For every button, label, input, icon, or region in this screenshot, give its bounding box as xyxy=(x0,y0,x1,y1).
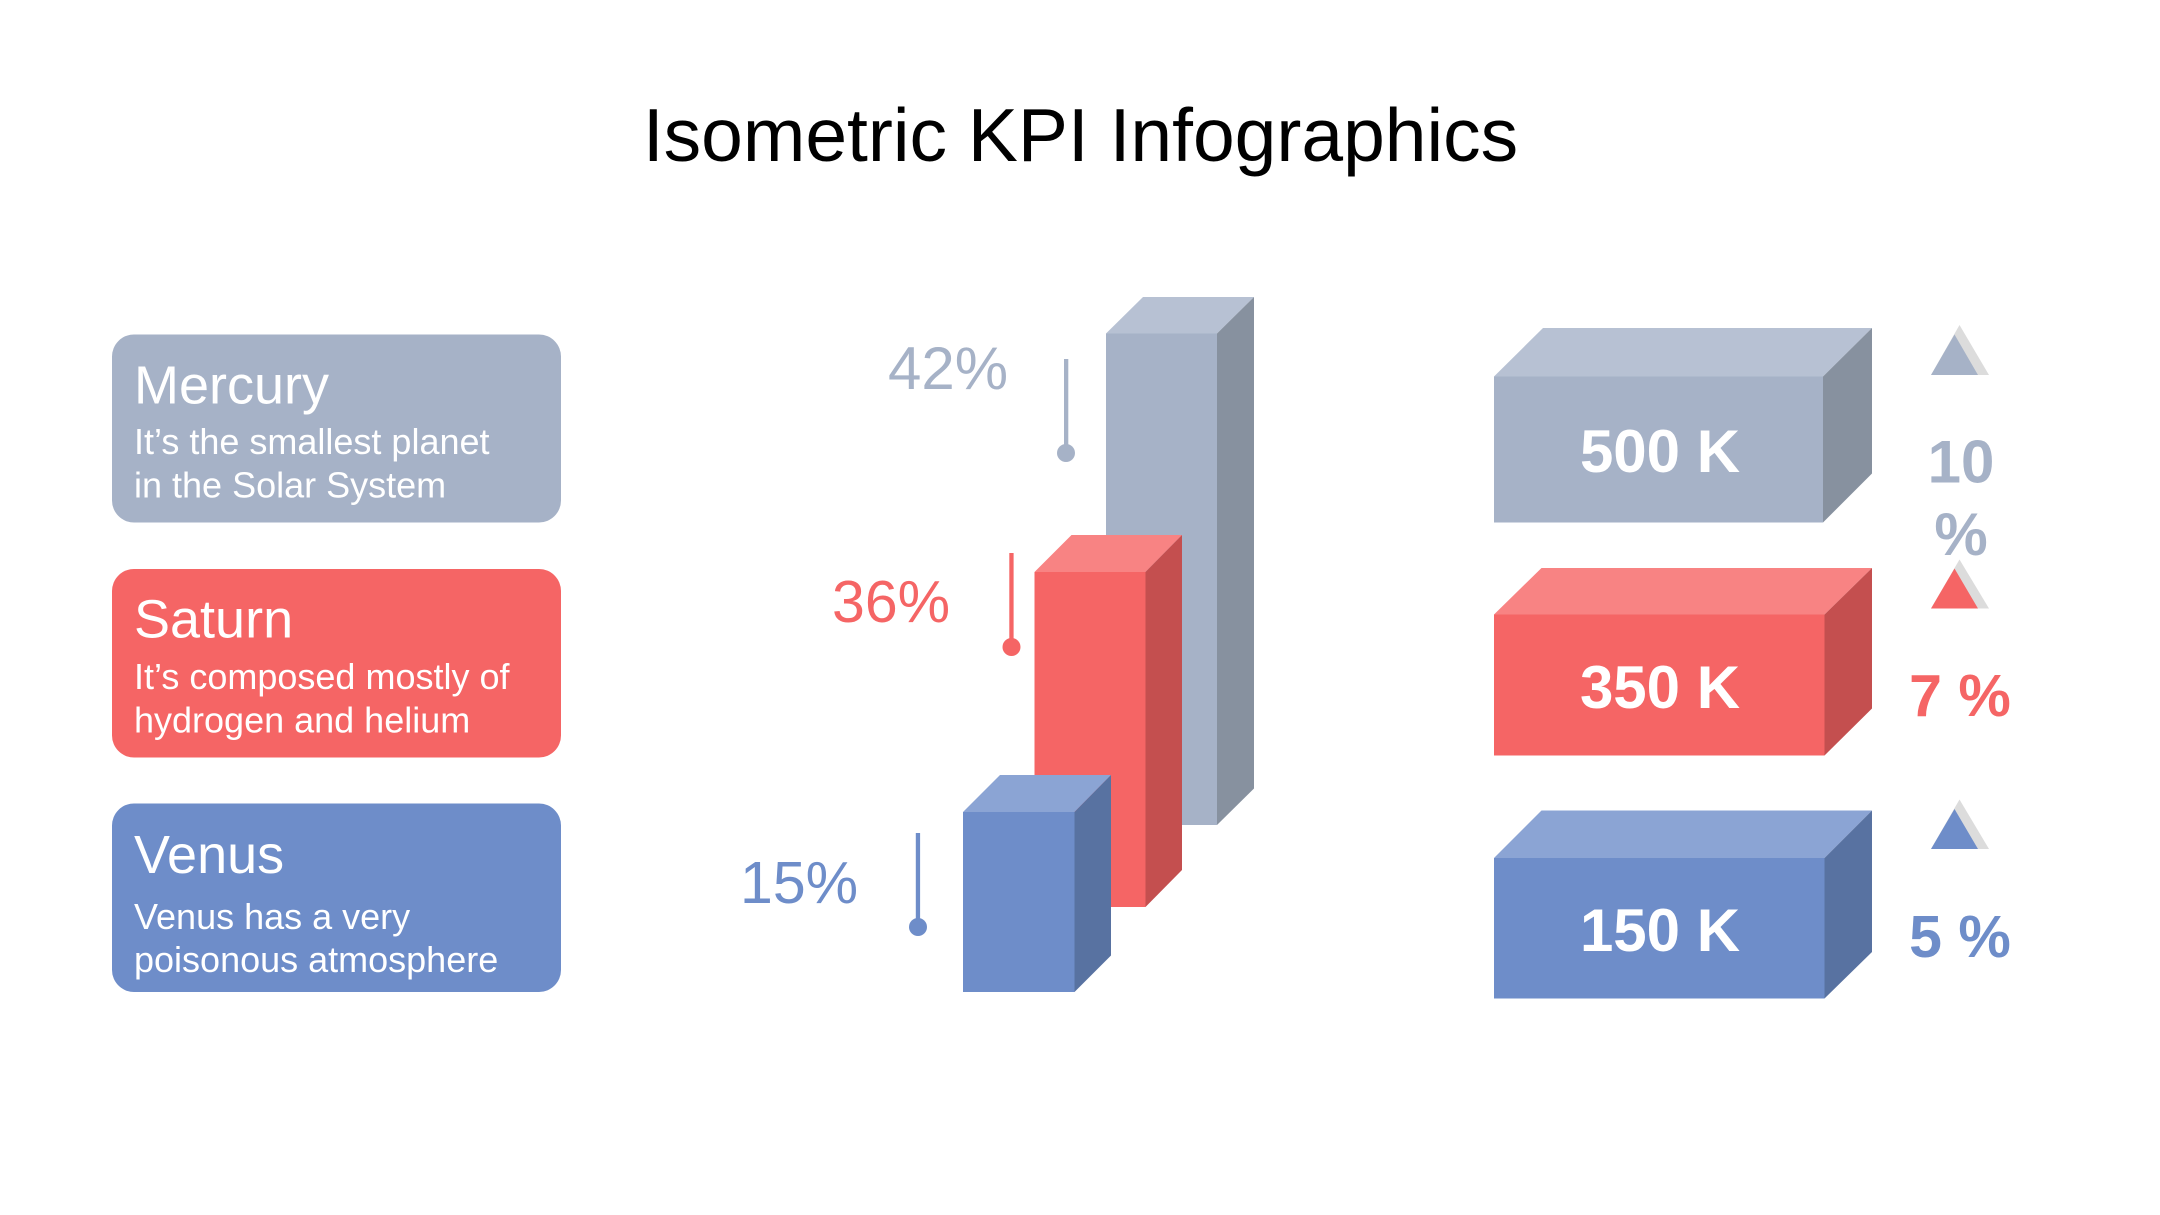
block: 150 K xyxy=(1494,810,1872,998)
block: 500 K: 500 K xyxy=(1580,418,1740,485)
bar: Mercury 42% xyxy=(1106,297,1254,825)
card: Saturn xyxy=(112,569,561,758)
callout: 36% xyxy=(832,553,1020,656)
card: Venus xyxy=(112,804,561,992)
card: Saturn: hydrogen and helium xyxy=(134,700,470,740)
indicator: 10 %: 10 xyxy=(1928,428,1994,496)
block: 150 K: 150 K xyxy=(1580,897,1740,964)
callout: 15% xyxy=(740,833,927,936)
indicator: 7 % xyxy=(1909,560,2011,729)
panel: KPI blocks xyxy=(1494,328,1872,998)
card: Venus: Venus xyxy=(134,825,284,885)
card: Mercury xyxy=(112,334,561,522)
panel: planet legend cards xyxy=(112,334,561,992)
bar: Saturn 36% xyxy=(1034,535,1182,907)
indicator: 10 %: % xyxy=(1934,501,1988,568)
callout: 36%: 36% xyxy=(832,569,950,635)
chart: isometric bars xyxy=(963,297,1254,992)
callout: 15%: 15% xyxy=(740,850,858,916)
card: Saturn: Saturn xyxy=(134,590,293,650)
bar: Venus 15% xyxy=(963,775,1111,992)
card: Venus: poisonous atmosphere xyxy=(134,939,498,980)
card: Saturn: It’s composed mostly of xyxy=(134,656,510,697)
panel: growth indicators xyxy=(1909,325,2011,970)
indicator: 5 % xyxy=(1909,800,2011,970)
block: 500 K xyxy=(1494,328,1872,522)
block: 350 K: 350 K xyxy=(1580,654,1740,721)
indicator: 5 %: 5 % xyxy=(1909,904,2011,970)
callout: 42%: 42% xyxy=(888,335,1008,402)
card: Venus: Venus has a very xyxy=(134,896,410,937)
callout: 42% xyxy=(888,335,1075,462)
title: Isometric KPI Infographics xyxy=(643,93,1518,177)
card: Mercury: Mercury xyxy=(134,356,329,416)
indicator: 7 %: 7 % xyxy=(1909,663,2011,729)
indicator: 10 % xyxy=(1928,325,1994,568)
block: 350 K xyxy=(1494,568,1872,756)
card: Mercury: It’s the smallest planet xyxy=(134,421,490,462)
card: Mercury: in the Solar System xyxy=(134,464,446,506)
